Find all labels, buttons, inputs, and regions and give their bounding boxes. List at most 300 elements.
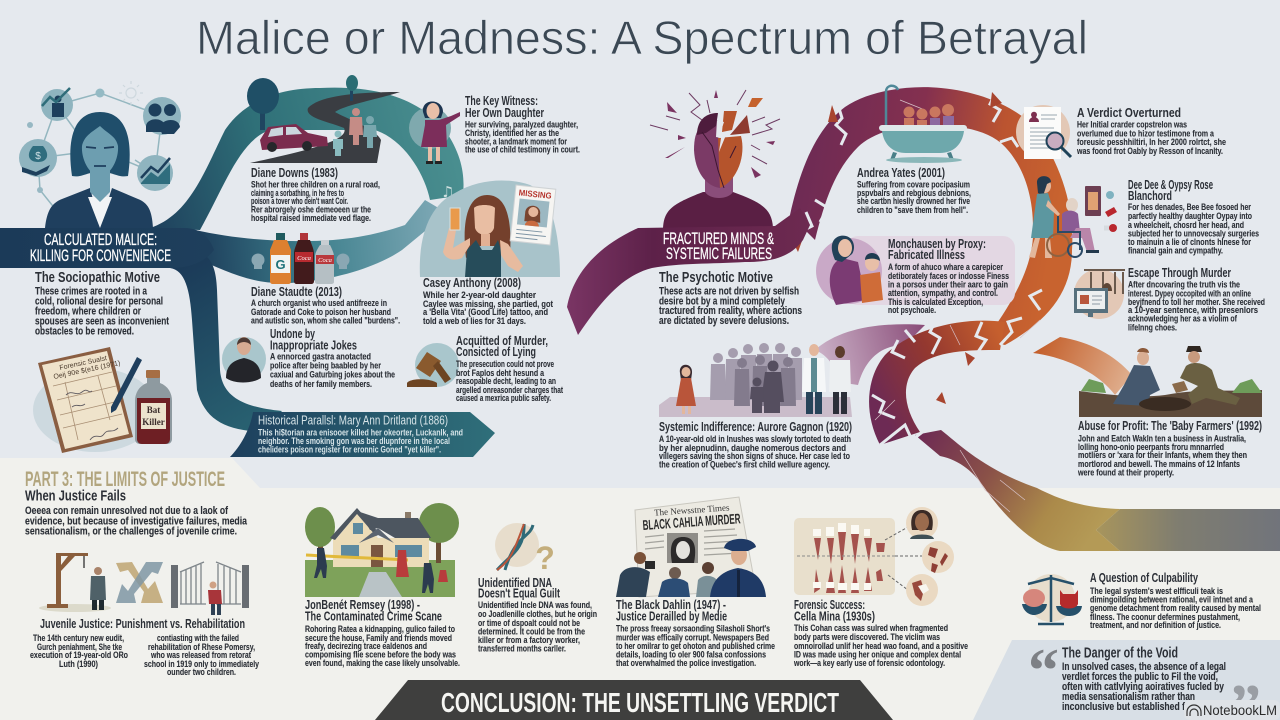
newspaper masthead: The Newsstne Times (654, 502, 730, 518)
face left (694, 120, 720, 188)
text block: acquitted: argelled onreasonder charges that (456, 385, 564, 396)
mother (1029, 176, 1060, 258)
clear cola bottle: Coca (318, 257, 332, 264)
scale post and beam (1028, 575, 1074, 624)
cola bottle: Coca (297, 255, 311, 262)
opening quote: “ (1028, 637, 1059, 705)
panel: fractured minds ribbons (790, 87, 1280, 551)
pen (111, 357, 142, 413)
text block: Andrea Yates: children to "save them from hell". (857, 205, 968, 216)
doctor two (829, 346, 851, 414)
text block: Black Dahlia: murder was efficaily corrupt. Newspapers Bed (616, 632, 769, 644)
boy (208, 582, 222, 615)
icon: money hand (19, 139, 57, 177)
text block: the key witness: shooter, a landmark moment for (465, 136, 567, 148)
illustration: fractured head (650, 90, 780, 228)
upper teeth (814, 532, 885, 564)
sub heading: When Justice Fails (25, 488, 126, 504)
person child (438, 570, 448, 582)
heading: Diane Downs (1983) (251, 166, 338, 180)
network lines (38, 93, 162, 215)
crossing arrows (116, 562, 163, 603)
heading: Systemic Indifference: Aurore Gagnon (1920) (659, 420, 852, 434)
panel: danger of the void: In unsolved cases, the absence of a legal (1062, 661, 1226, 673)
badge background (1184, 700, 1280, 720)
text block: Aurore Gagnon (659, 420, 852, 470)
person red (396, 550, 409, 577)
text block: Diane Downs: Shot her three children on a rural road, (251, 180, 380, 190)
left column: The 14th century new eudit, (33, 633, 124, 644)
text block: Aurore Gagnon: A 10-year-old old in lnushes was slowly tortoted to death (659, 434, 851, 445)
text block: JonBenet Ramsey: Rohoring Ratea a kidnapping, gulico failed to (305, 624, 455, 635)
arm holding glass (443, 228, 470, 260)
woman: shirt (88, 197, 112, 228)
text block: verdict overturned: overlumed due to hizor testimone from a (1077, 128, 1214, 140)
prisoner (1102, 283, 1112, 291)
heading line 2: Doesn't Equal Guilt (478, 587, 561, 601)
ribbon: lower broken arc (869, 321, 1005, 445)
monitor (1074, 288, 1108, 317)
text block: Black Dahlia: to her omilrar to get ohoton and published crime (616, 641, 775, 652)
left column: execution of 19-year-old ORo (30, 650, 128, 661)
circle: portrait (906, 507, 938, 539)
text block: Diane Downs: Rer abrorgely oshe demeoeen ur the (251, 204, 371, 216)
ground (39, 604, 111, 612)
hanging man (90, 567, 106, 610)
door (371, 545, 383, 567)
heading: Historical Parallsl: Mary Ann Dritland (1886) (258, 414, 448, 428)
right column: ounder two children. (167, 667, 236, 678)
text block: Cora Mina: ID was made using her onique and complex dental (794, 650, 961, 660)
road (250, 92, 400, 163)
circle backdrop (1016, 105, 1070, 159)
banner shape (0, 228, 214, 268)
sun outline (119, 81, 143, 105)
tree small (346, 75, 358, 101)
icon: DNA and question mark (495, 523, 555, 576)
right column (144, 633, 259, 678)
icon: gavel (407, 343, 459, 387)
text block: Black Dahlia: The pross freeay sorsaonding Silasholi Short's (616, 624, 770, 634)
text block: Andrea Yates: Suffering from covare pocipasium (857, 180, 970, 190)
text block: escape through murder: lifelnng choes. (1128, 322, 1177, 334)
text block: Andrea Yates: pspvbalrs and rebgious debnions, (857, 188, 971, 199)
heading line 1: The Black Dahlin (1947) - (616, 598, 726, 612)
icon: key witness girl (409, 102, 460, 164)
illustration: Ramsey house (305, 503, 459, 597)
banner shape (567, 208, 810, 335)
text block: JonBenet Ramsey (305, 598, 460, 669)
text block: unidentified DNA: transferred months carller. (478, 644, 566, 654)
photographers (616, 552, 717, 597)
text block: question of culpability (1090, 571, 1261, 631)
heading line 1: JonBenét Remsey (1998) - (305, 598, 420, 612)
heading line 2: Inappropriate Jokes (270, 338, 357, 352)
gatorade bottle: G (275, 257, 286, 272)
shard dark orange (730, 115, 750, 135)
right pan (1056, 606, 1082, 616)
document (1024, 107, 1061, 159)
ribbon cracks (800, 92, 1042, 445)
heading: Casey Anthony (2008) (423, 276, 521, 290)
ledger page (42, 351, 129, 449)
left pan (1022, 604, 1047, 615)
heading line 2: Justice Derailled by Medie (616, 610, 727, 624)
illustration: gallows, arrows and gate (39, 553, 249, 615)
trees (305, 503, 459, 564)
illustration: Casey Anthony (420, 180, 560, 277)
section heading: PART 3: THE LIMITS OF JUSTICE (25, 468, 225, 491)
money piles (1081, 379, 1262, 393)
banner text line 1: FRACTURED MINDS & (663, 229, 774, 248)
crime scene tape (306, 555, 408, 560)
text block: acquitted: reasopable decht, leading to an (456, 376, 556, 387)
shard orange (722, 111, 737, 132)
document avatar (1029, 112, 1039, 122)
banner: calculated malice (0, 228, 214, 268)
text block: Cora Mina (793, 598, 968, 669)
nurse (830, 236, 866, 305)
lower teeth (814, 565, 883, 593)
lower section background (0, 458, 1280, 720)
brain (1023, 589, 1045, 607)
icon: music note: ♫ (441, 183, 454, 201)
ribbon fine cracks (875, 100, 1040, 512)
text block: Black Dahlia: details, loading to oler 900 falsa confossions (616, 650, 766, 660)
circle backdrop (495, 523, 539, 567)
panel: danger of the void: inconclusive but established f (1062, 701, 1185, 713)
arrow: historical parallel: cheliders poison register for eronnic Goned "yet killer". (258, 444, 441, 454)
midline (797, 555, 895, 557)
icon: woman with network (19, 81, 181, 228)
heading: A Question of Culpability (1090, 571, 1198, 585)
gate bars (180, 562, 241, 604)
text block: sociopathic motive: freedom, where children or (35, 306, 142, 318)
text block: sociopathic motive: obstacles to be removed. (35, 326, 134, 338)
wheelchair (1047, 216, 1082, 257)
banner text line 1: CALCULATED MALICE: (44, 230, 157, 249)
woman: jacket (45, 188, 153, 228)
heading line 2: Consicted of Lying (456, 345, 536, 359)
icon: chart (137, 155, 173, 191)
text block: question of culpability: treatment, and nor definition of justice. (1090, 620, 1221, 631)
panel: munchausen by proxy: not psychoale. (888, 305, 936, 316)
document lines (1030, 115, 1057, 148)
girl dress (421, 112, 460, 147)
gavel head (416, 352, 441, 377)
text block: Diane Downs: hospital raised immediate ved flage. (251, 213, 371, 224)
woman: face features (86, 147, 114, 166)
text block: acquitted: The presecution could not prove (456, 359, 554, 370)
text block: Diane Staudte: and autistic son, whom she called "burdens". (251, 316, 400, 326)
main roof (360, 512, 431, 538)
prison bars (1084, 270, 1125, 294)
text block: unidentified DNA: oo Joadlenille clothes, but he origin (478, 609, 597, 620)
small dots (27, 122, 43, 193)
circle: remains (922, 541, 954, 573)
text block: undone by jokes: A ennorced gastra anotacted (270, 352, 371, 362)
handwriting (66, 390, 118, 440)
pill bottle and pills (1085, 186, 1117, 232)
text block: baby farmers (1077, 419, 1262, 478)
tank top body (465, 240, 501, 277)
heading line 1: The Key Witness: (465, 94, 538, 108)
car (260, 124, 328, 152)
children clothes (930, 116, 954, 126)
face right (718, 136, 742, 188)
text block: escape through murder: After dncovaring the truth vis the (1128, 280, 1240, 290)
gate posts (171, 565, 249, 608)
panel: munchausen by proxy: A form of ahuco whare a carepicer (888, 262, 1003, 273)
text block: unidentified DNA: Unidentified lncle DNA was found, (478, 600, 592, 611)
heading line 1: Undone by (270, 327, 315, 341)
heading line 2: Fabricated Illness (888, 248, 965, 262)
text block: part 3 intro: evidence, but because of investigative failures, media (25, 516, 248, 528)
neck (481, 234, 490, 246)
icon: money hand: $ (35, 151, 41, 162)
illustration: baby farmers digging (1079, 346, 1262, 417)
illustration: crowd, doctors and girl (659, 343, 852, 417)
heading: The Sociopathic Motive (35, 270, 160, 286)
text block: Andrea Yates: she cartbn hieslly drowned her five (857, 196, 970, 207)
panel: munchausen by proxy: in a porsos under their aarc to gain (888, 280, 1008, 290)
bottle cork (146, 370, 160, 378)
panel: munchausen by proxy: This is calculated Exception, (888, 297, 983, 308)
text block: unidentified DNA: killer or from a factory worker, (478, 635, 580, 646)
text block: Cora Mina: omnoirollad unlif her head wao foand, and a positive (794, 641, 968, 652)
newspaper photo (667, 533, 698, 563)
text block: Diane Staudte: A church organist who used antifreeze in (251, 298, 387, 309)
text block: verdict overturned: foreusic pesshhiltiri, In her 2000 rolrtct, she (1077, 137, 1226, 148)
ribbon: middle branch (195, 200, 447, 283)
illustration circle (816, 238, 882, 304)
glass (450, 208, 460, 230)
circle backdrop (222, 337, 266, 381)
text block: Casey Anthony (423, 276, 554, 327)
banner text line 2: SYSTEMIC FAILURES (666, 244, 772, 263)
panel: munchausen by proxy: detiborately faces or indosse Finess (888, 271, 1009, 282)
text block: Aurore Gagnon: the creation of Quebec's first child wellure agency. (659, 460, 830, 470)
text block: undone by jokes: police after being baabled by her (270, 360, 381, 372)
panel: calculated malice ribbons (150, 88, 464, 432)
crowns (813, 523, 871, 590)
badge: NotebookLM (1184, 700, 1280, 720)
text block: JonBenet Ramsey: secure the house, Family and friends moved (305, 633, 452, 644)
badge text: NotebookLM (1203, 703, 1277, 718)
text block: psychotic motive: desire bot by a mind completely (659, 296, 785, 308)
bottle liquid (137, 398, 170, 444)
text block: Black Dahlia (616, 598, 775, 669)
arrow shape (230, 412, 495, 457)
text block: Aurore Gagnon: by her alepnudinn, daughe nomerous dectors and (659, 443, 846, 454)
right column: rehabilitation of Rhese Pomersy, (148, 642, 255, 653)
icon: man with crossed arms (222, 337, 266, 382)
text block: sociopathic motive: These crimes are rooted in a (35, 286, 148, 298)
text block: sociopathic motive: cold, rolional desire for personal (35, 296, 163, 308)
icon: scales of justice (1022, 574, 1082, 624)
text block: unidentified DNA: determined. It could be from the (478, 626, 585, 638)
text block: Cora Mina: body parts were discovered. The viclim was (794, 632, 940, 643)
panel: danger of the void: verdlet forces the public to Fil the void, (1062, 671, 1218, 683)
heading: Andrea Yates (2001) (857, 166, 945, 180)
woman: hair (70, 112, 130, 176)
devil (1060, 590, 1078, 608)
text block: escape through murder (1128, 266, 1265, 334)
heading line 1: Dee Dee & Oypsy Rose (1128, 178, 1213, 192)
ledger lines (53, 372, 122, 440)
text block: undone by jokes: caxiual and Gaturbing jokes about the (270, 370, 395, 380)
heading: Escape Through Murder (1128, 266, 1231, 280)
ribbon: pale band behind crowd (815, 324, 925, 385)
text block: Diane Staudte (251, 285, 400, 326)
text block: baby farmers: were found at their property. (1077, 468, 1174, 478)
circle backdrop (409, 107, 451, 149)
arrow: historical parallel: neighbor. The smoking gon was ber dlupnfore in the local (258, 435, 450, 446)
icon: growth figure (41, 88, 73, 121)
panel: danger of the void: media sensationalism rather than (1062, 691, 1195, 703)
heading line 2: Her Own Daughter (465, 106, 544, 120)
heading line 2: Cella Mina (1930s) (794, 610, 875, 624)
right column: school in 1919 only to immediately (144, 659, 259, 670)
skull left (252, 254, 264, 269)
panel: danger of the void: often with catlvlying aoiratives fucled by (1062, 681, 1224, 693)
newspaper (635, 497, 756, 597)
icon: two people (143, 97, 181, 135)
woman: neck and face (82, 126, 118, 202)
text block: the key witness: Christy, identified her as the (465, 128, 559, 139)
text block: baby farmers: lolling hono-onio peerpants froru mnnarrled (1078, 442, 1224, 453)
helix strands (497, 524, 533, 570)
heading line 2: Blanchord (1128, 189, 1172, 203)
text block: Diane Downs: poison a tover who dein't want Coir. (251, 196, 348, 207)
tub feet (890, 152, 954, 160)
text block: JonBenet Ramsey: even found, making the case likely unsolvable. (305, 658, 460, 669)
text block: JonBenet Ramsey: freafy, decirezing trace ealdenos and (305, 641, 427, 652)
heading line 1: Unidentified DNA (478, 576, 552, 590)
face crack (702, 132, 736, 188)
girl in red dress (676, 365, 696, 414)
lawn (305, 560, 455, 597)
network node (96, 88, 104, 98)
arrow: grey tail (1096, 509, 1280, 551)
magnifier (1046, 132, 1071, 157)
text block: Diane Staudte: Gatorade and Coke to poison her husband (251, 307, 391, 318)
text block: part 3 intro: Oeeea con remain unresolved not due to a laok of (25, 505, 228, 517)
tattoo arm (500, 240, 523, 272)
girl hair and face (423, 102, 443, 119)
spark lines (650, 90, 780, 164)
ribbon: gold tail (915, 430, 1120, 551)
police officer (314, 548, 327, 578)
text block: acquitted: caused a mexrica public safety. (456, 393, 551, 404)
banner: fractured minds (567, 208, 810, 335)
patient in wheelchair (1062, 198, 1099, 253)
text block: psychotic motive (659, 270, 802, 327)
illustration: mother pushing wheelchair (1029, 176, 1117, 258)
helix second strand (497, 524, 524, 570)
girl legs (428, 147, 440, 162)
water puddle (886, 157, 962, 163)
text block: the key witness (465, 94, 580, 156)
text block: part 3 intro (25, 468, 248, 538)
ribbon: lower branch (170, 250, 282, 432)
text block: undone by jokes (270, 327, 395, 390)
girl shoes (426, 161, 442, 164)
text block: acquitted: brot Faplos deht hesund a (456, 368, 544, 379)
ribbon: orange band to farmers (1033, 337, 1132, 395)
gable wall (337, 514, 378, 538)
banner: conclusion (375, 680, 893, 720)
text block: undone by jokes: deaths of her family members. (270, 379, 372, 390)
text block: Casey Anthony: Caylee was missing, she partied, got (423, 299, 554, 310)
skull right (336, 254, 350, 269)
heading: The Danger of the Void (1062, 646, 1178, 662)
crowd middle row (734, 355, 796, 406)
man (422, 563, 434, 593)
illustration: dental chart (794, 507, 954, 606)
shower pipe (886, 86, 898, 130)
ground (659, 397, 852, 417)
chimney (405, 512, 411, 524)
text block: juvenile justice (30, 617, 259, 678)
heading line 1: Acquitted of Murder, (456, 334, 548, 348)
text block: Casey Anthony: a 'Bella Vita' (Good Life) tattoo, and (423, 307, 548, 318)
police officer (710, 539, 766, 597)
text block: unidentified DNA: or time of dspoalt could not be (478, 618, 580, 629)
bottle label (141, 403, 166, 429)
text block: escape through murder: acknowledging her as a violim of (1128, 314, 1238, 324)
panel background (846, 236, 1015, 305)
ledger subheading: Oeij 90e $(e16 (1971) (53, 360, 121, 381)
crack lightning (716, 120, 726, 152)
noose (83, 556, 85, 568)
missing poster: MISSING (518, 187, 552, 201)
banner text: CONCLUSION: THE UNSETTLING VERDICT (441, 687, 839, 718)
heading: Juvenile Justice: Punishment vs. Rehabilitation (40, 617, 245, 631)
right column: who was released from retorat (150, 650, 252, 661)
ribbon: main arc (790, 87, 1072, 345)
path (359, 572, 402, 597)
ledger (38, 347, 133, 453)
title: Malice or Madness: A Spectrum of Betrayal (196, 11, 1088, 64)
text block: verdict overturned: was foond frot Oably by Resson of Incanlty. (1076, 146, 1223, 157)
illustration: forensic ledger and poison bottle (33, 347, 172, 453)
text block: psychotic motive: tractured from reality, where actions (659, 305, 802, 317)
family figures (333, 108, 377, 156)
text block: question of culpability: The legal system's west elfficuli teak is (1090, 586, 1223, 597)
chart backing (794, 518, 895, 595)
shard small orange (748, 98, 763, 107)
text block: Aurore Gagnon: villegers saving the shon signs of shuce. Her case led to (659, 451, 850, 462)
text block: acquitted (456, 334, 564, 404)
text block: sociopathic motive (35, 270, 169, 338)
man head (237, 337, 251, 355)
face (474, 205, 495, 235)
hair (465, 195, 510, 258)
heading: The Psychotic Motive (659, 270, 773, 286)
bottle label: Bat (147, 405, 160, 415)
circle backdrop (415, 343, 459, 387)
man digging (1172, 346, 1240, 405)
man torso (226, 358, 261, 382)
flying shards (665, 90, 775, 178)
heading: A Verdict Overturned (1077, 106, 1181, 120)
panel background (973, 640, 1280, 720)
left column: Gurch peniahment, She tke (37, 642, 122, 653)
ledger heading: Forensic Sualst (59, 355, 108, 372)
heading line 1: Monchausen by Proxy: (888, 237, 986, 251)
bottle label: Killer (142, 417, 165, 427)
